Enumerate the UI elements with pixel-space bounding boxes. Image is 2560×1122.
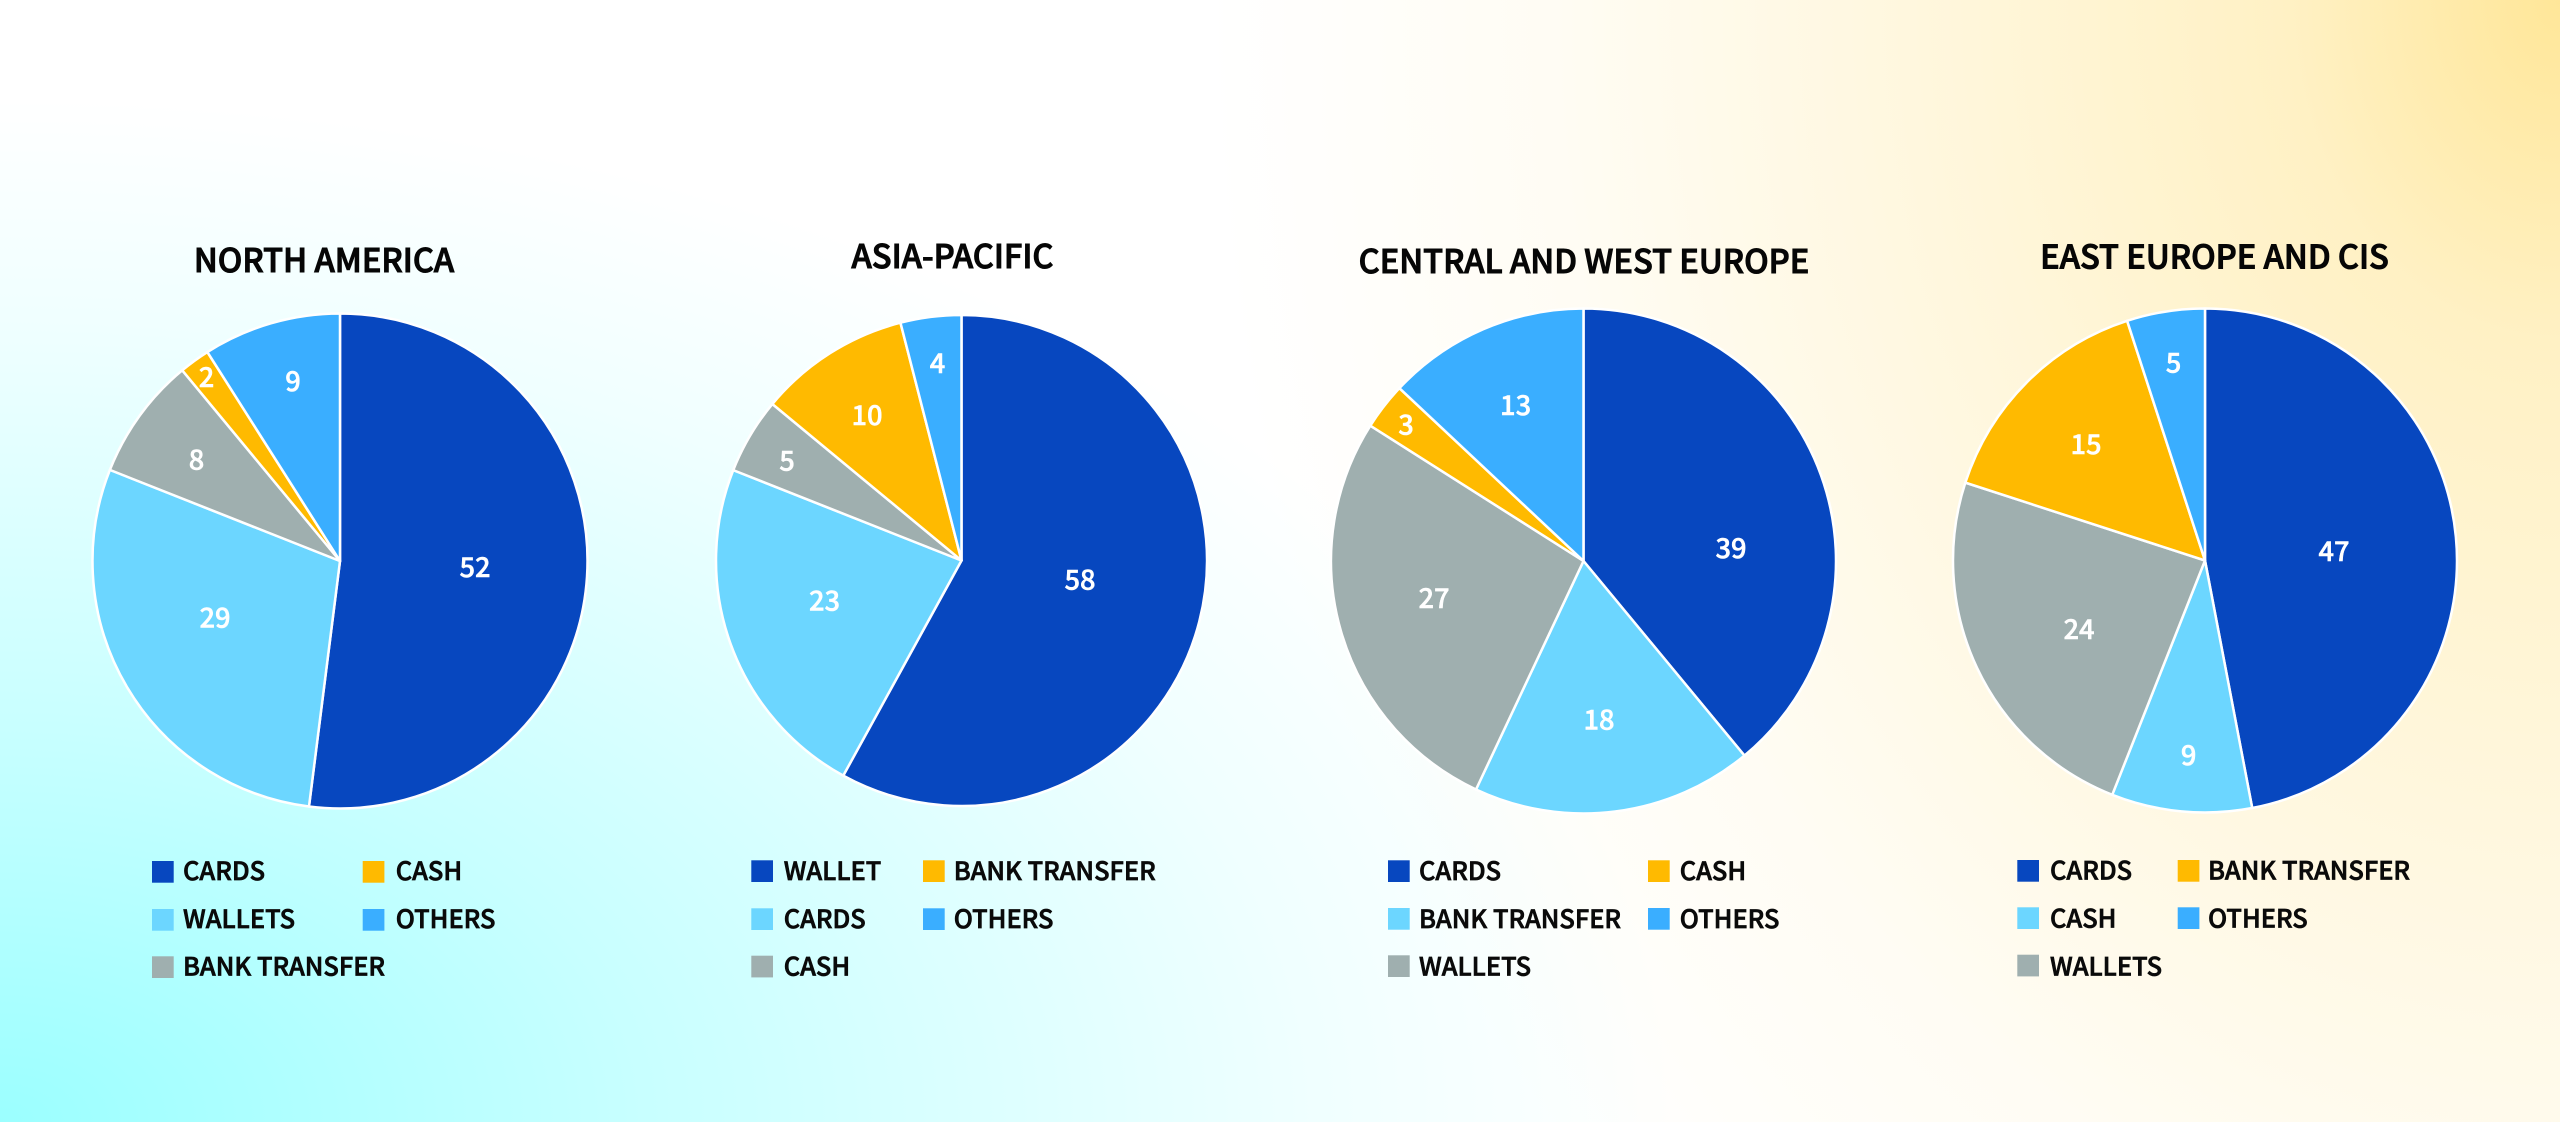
legend: Central and West Europe (1388, 852, 1779, 984)
pie values: Central and West Europe: 3 (1398, 402, 1414, 442)
pie values: North America: 8 (189, 438, 204, 478)
pie values: Central and West Europe (1398, 383, 1747, 738)
legend: North America: WALLETS (183, 900, 295, 936)
pie values: Asia-Pacific: 5 (779, 438, 795, 478)
pie chart: East Europe and CIS (1953, 308, 2457, 812)
pie values: North America (189, 355, 491, 636)
pie values: East Europe and CIS (2063, 340, 2350, 773)
heading: East Europe and CIS: EAST EUROPE AND CIS (2040, 232, 2389, 278)
legend: East Europe and CIS: BANK TRANSFER (2208, 852, 2410, 888)
heading: Asia-Pacific: ASIA-PACIFIC (852, 231, 1053, 278)
heading: Central and West Europe: CENTRAL AND WEST EUROPE (1359, 236, 1809, 283)
legend: Asia-Pacific (751, 852, 1156, 984)
pie chart: Asia-Pacific (716, 315, 1207, 806)
legend: Central and West Europe: CASH (1680, 852, 1746, 888)
panel: East Europe and CIS (1953, 232, 2457, 983)
pie values: East Europe and CIS: 47 (2318, 529, 2350, 569)
panel: Asia-Pacific (716, 231, 1207, 984)
pie values: North America: 2 (199, 355, 214, 395)
legend: Central and West Europe: CARDS (1419, 852, 1501, 888)
legend: Asia-Pacific: BANK TRANSFER (954, 852, 1156, 888)
pie values: North America: 9 (285, 359, 301, 399)
pie values: Asia-Pacific: 58 (1064, 558, 1096, 598)
panel: Central and West Europe (1331, 236, 1836, 984)
pie values: North America: 52 (459, 545, 491, 585)
pie values: Central and West Europe: 39 (1715, 526, 1747, 566)
pie values: East Europe and CIS: 5 (2166, 340, 2181, 380)
pie values: Central and West Europe: 13 (1500, 383, 1531, 423)
pie chart: Central and West Europe (1331, 308, 1836, 814)
pie values: Asia-Pacific: 10 (851, 393, 883, 433)
legend: Central and West Europe: OTHERS (1680, 900, 1779, 936)
legend: North America: CASH (396, 852, 462, 888)
pie values: East Europe and CIS: 9 (2181, 733, 2196, 773)
legend: East Europe and CIS: CASH (2050, 900, 2116, 936)
pie chart: North America (92, 313, 588, 809)
legend: Central and West Europe: BANK TRANSFER (1419, 900, 1621, 936)
legend: Asia-Pacific: OTHERS (954, 900, 1053, 936)
pie values: Asia-Pacific: 4 (930, 341, 945, 381)
legend: East Europe and CIS (2017, 852, 2410, 983)
pie values: Central and West Europe: 27 (1418, 576, 1450, 616)
legend: North America: CARDS (183, 852, 265, 888)
legend: Asia-Pacific: CASH (784, 948, 850, 984)
legend: Asia-Pacific: WALLET (784, 852, 881, 888)
pie values: Asia-Pacific (779, 341, 1096, 618)
heading: North America: NORTH AMERICA (194, 235, 455, 282)
pie values: East Europe and CIS: 24 (2063, 607, 2095, 647)
legend: East Europe and CIS: CARDS (2050, 852, 2132, 888)
pie values: Asia-Pacific: 23 (809, 578, 840, 618)
pie values: Central and West Europe: 18 (1583, 698, 1615, 738)
legend: Central and West Europe: WALLETS (1419, 948, 1531, 984)
legend: Asia-Pacific: CARDS (784, 900, 866, 936)
legend: East Europe and CIS: WALLETS (2050, 947, 2162, 983)
legend: East Europe and CIS: OTHERS (2208, 900, 2308, 936)
legend: North America (152, 852, 495, 984)
pie values: North America: 29 (199, 596, 231, 636)
legend: North America: BANK TRANSFER (183, 948, 385, 984)
pie values: East Europe and CIS: 15 (2070, 422, 2102, 462)
panel: North America (92, 235, 588, 984)
legend: North America: OTHERS (396, 900, 495, 936)
